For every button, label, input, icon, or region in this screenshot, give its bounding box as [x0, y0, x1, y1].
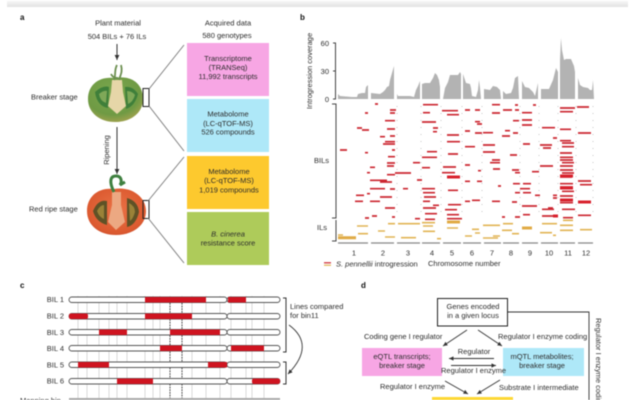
box: metabolome red ripe: [187, 156, 269, 209]
heading: plant material: Plant material: [95, 18, 141, 28]
heatmap: dense blocks: [447, 176, 591, 216]
chromosome numbers: 12: [582, 248, 590, 258]
panel c: bin mapping: [20, 281, 343, 400]
BIL row labels: BIL 4: [47, 344, 64, 353]
panel letter a: a: [20, 13, 25, 22]
chromosome numbers: 8: [509, 248, 513, 258]
box: yellow: [432, 397, 513, 400]
box: eQTL: eQTL transcripts;: [373, 352, 431, 361]
label: ILs: ILs: [317, 223, 327, 232]
label: lines compared: for bin11: [290, 311, 319, 320]
bin grid lines: [78, 296, 264, 400]
label: regulator enzyme centre: Regulator I enzyme: [441, 366, 506, 375]
box: transcriptome: 11,992 transcripts: [198, 72, 258, 81]
heading: acquired data: 580 genotypes: [202, 31, 252, 40]
box: metabolome breaker: Metabolome: [207, 110, 249, 118]
box: resistance score: resistance score: [201, 238, 255, 248]
inset markers on tomatoes: [143, 88, 149, 218]
chromosome numbers: 7: [490, 248, 494, 258]
heatmap axis: [332, 104, 336, 241]
heading: acquired data: Acquired data: [205, 18, 252, 28]
box: eQTL: breaker stage: [379, 361, 425, 370]
panel letter c: c: [20, 281, 25, 290]
arrow: lower left: [445, 381, 468, 394]
chromosome tracks: [69, 297, 280, 384]
panel d: interpretation flow: [361, 281, 603, 400]
axis title: coverage: Introgression coverage: [305, 33, 314, 109]
box: genes: Genes encoded: [447, 302, 499, 311]
label: ripening: Ripening: [102, 135, 111, 165]
bin 11 dashed lines: [170, 303, 182, 400]
box: metabolome red ripe: (LC-qTOF-MS): [204, 176, 254, 185]
box: transcriptome: Transcriptome: [204, 54, 252, 63]
coverage axis: 30: [321, 67, 329, 76]
panel letter b: b: [300, 13, 305, 22]
box: metabolome red ripe: Metabolome: [208, 167, 250, 176]
zoom lines to data boxes: [148, 45, 184, 263]
arrow: to mQTL: [478, 330, 502, 346]
BIL row labels: BIL 3: [47, 328, 64, 337]
heading: plant material: 504 BILs + 76 ILs: [88, 32, 147, 41]
label: red ripe stage: Red ripe stage: [29, 204, 78, 214]
box: mQTL: mQTL metabolites;: [510, 352, 574, 361]
box: metabolome breaker: [187, 99, 269, 152]
coverage axis: [321, 39, 336, 104]
introgression segments: [69, 297, 280, 384]
bin strip: [69, 398, 280, 400]
curved arrow: [288, 325, 302, 374]
label: lines compared: Lines compared: [290, 302, 343, 311]
box: resistance score: [187, 212, 269, 265]
legend: S. pennellii introgression: [336, 260, 418, 268]
heatmap: BIL introgressions: [340, 104, 592, 219]
chromosome numbers: 3: [406, 248, 410, 258]
coverage axis: 0: [325, 95, 329, 104]
chromosome numbers: 4: [430, 248, 434, 258]
icon: red ripe tomato: [87, 176, 146, 235]
box: eQTL: [362, 348, 442, 376]
label: BILs: BILs: [314, 156, 329, 165]
top band: [7, 1, 628, 7]
label: substrate: Substrate I intermediate: [499, 383, 579, 392]
arrow: leftward: [449, 358, 494, 360]
heatmap: IL introgressions: [338, 220, 592, 239]
heatmap: thick IL blocks: [338, 222, 532, 238]
brackets: [283, 298, 286, 384]
chromosome numbers: [352, 248, 590, 258]
chromosome numbers: 1: [352, 248, 356, 258]
coverage axis: 60: [321, 39, 329, 48]
arrow: lower right: [477, 380, 500, 394]
arrow: ripening: [116, 127, 118, 174]
panel b: introgression coverage: [300, 13, 594, 268]
box: genes: [438, 298, 508, 326]
box: mQTL: [503, 348, 584, 376]
arrow: plant material to breaker: [116, 44, 118, 60]
heatmap: grey specks: [397, 106, 593, 218]
label: coding gene: Coding gene I regulator: [364, 332, 443, 341]
chromosome numbers: 5: [450, 248, 454, 258]
BIL row labels: BIL 1: [47, 295, 64, 304]
icon: breaker stage tomato: [88, 65, 143, 122]
chromosome numbers: 9: [528, 248, 532, 258]
arrow: to eQTL: [443, 330, 467, 346]
BIL row labels: BIL 2: [47, 312, 64, 320]
heading: plant material: [88, 18, 147, 41]
arrow: rightward: [451, 364, 496, 366]
box: transcriptome: [187, 43, 269, 96]
heading: acquired data: [202, 18, 252, 40]
box: resistance score: B. cinerea: [211, 230, 245, 238]
box: metabolome breaker: (LC-qTOF-MS): [203, 119, 253, 128]
box: metabolome red ripe: 1,019 compounds: [199, 186, 259, 194]
BIL row labels: BIL 6: [47, 376, 64, 386]
box: genes: in a given locus: [447, 311, 499, 320]
label: regulator enzyme lower: Regulator I enzyme: [380, 382, 445, 391]
chromosome numbers: 10: [545, 248, 553, 258]
panel letter d: d: [361, 281, 366, 290]
chromosome numbers: 2: [381, 248, 385, 258]
axis title: chromosome number: Chromosome number: [428, 259, 501, 268]
area chart: coverage by chromosome: [338, 38, 594, 99]
chromosome numbers: 6: [470, 248, 474, 258]
box: mQTL: breaker stage: [519, 361, 565, 370]
box: metabolome breaker: 526 compounds: [201, 128, 255, 136]
label: lines compared: [290, 302, 343, 320]
panel a: plant material and acquired data: [20, 13, 269, 265]
label: enzyme coding: Regulator I enzyme coding: [498, 332, 587, 341]
chromosome bars: [338, 242, 593, 244]
box: transcriptome: (TRANSeq): [209, 63, 248, 72]
BIL row labels: BIL 5: [47, 360, 64, 370]
connector line: [508, 312, 589, 400]
BIL row labels: [47, 295, 64, 386]
chromosome numbers: 11: [564, 248, 572, 258]
label: regulator: Regulator: [458, 347, 491, 356]
label: breaker stage: Breaker stage: [31, 92, 78, 102]
